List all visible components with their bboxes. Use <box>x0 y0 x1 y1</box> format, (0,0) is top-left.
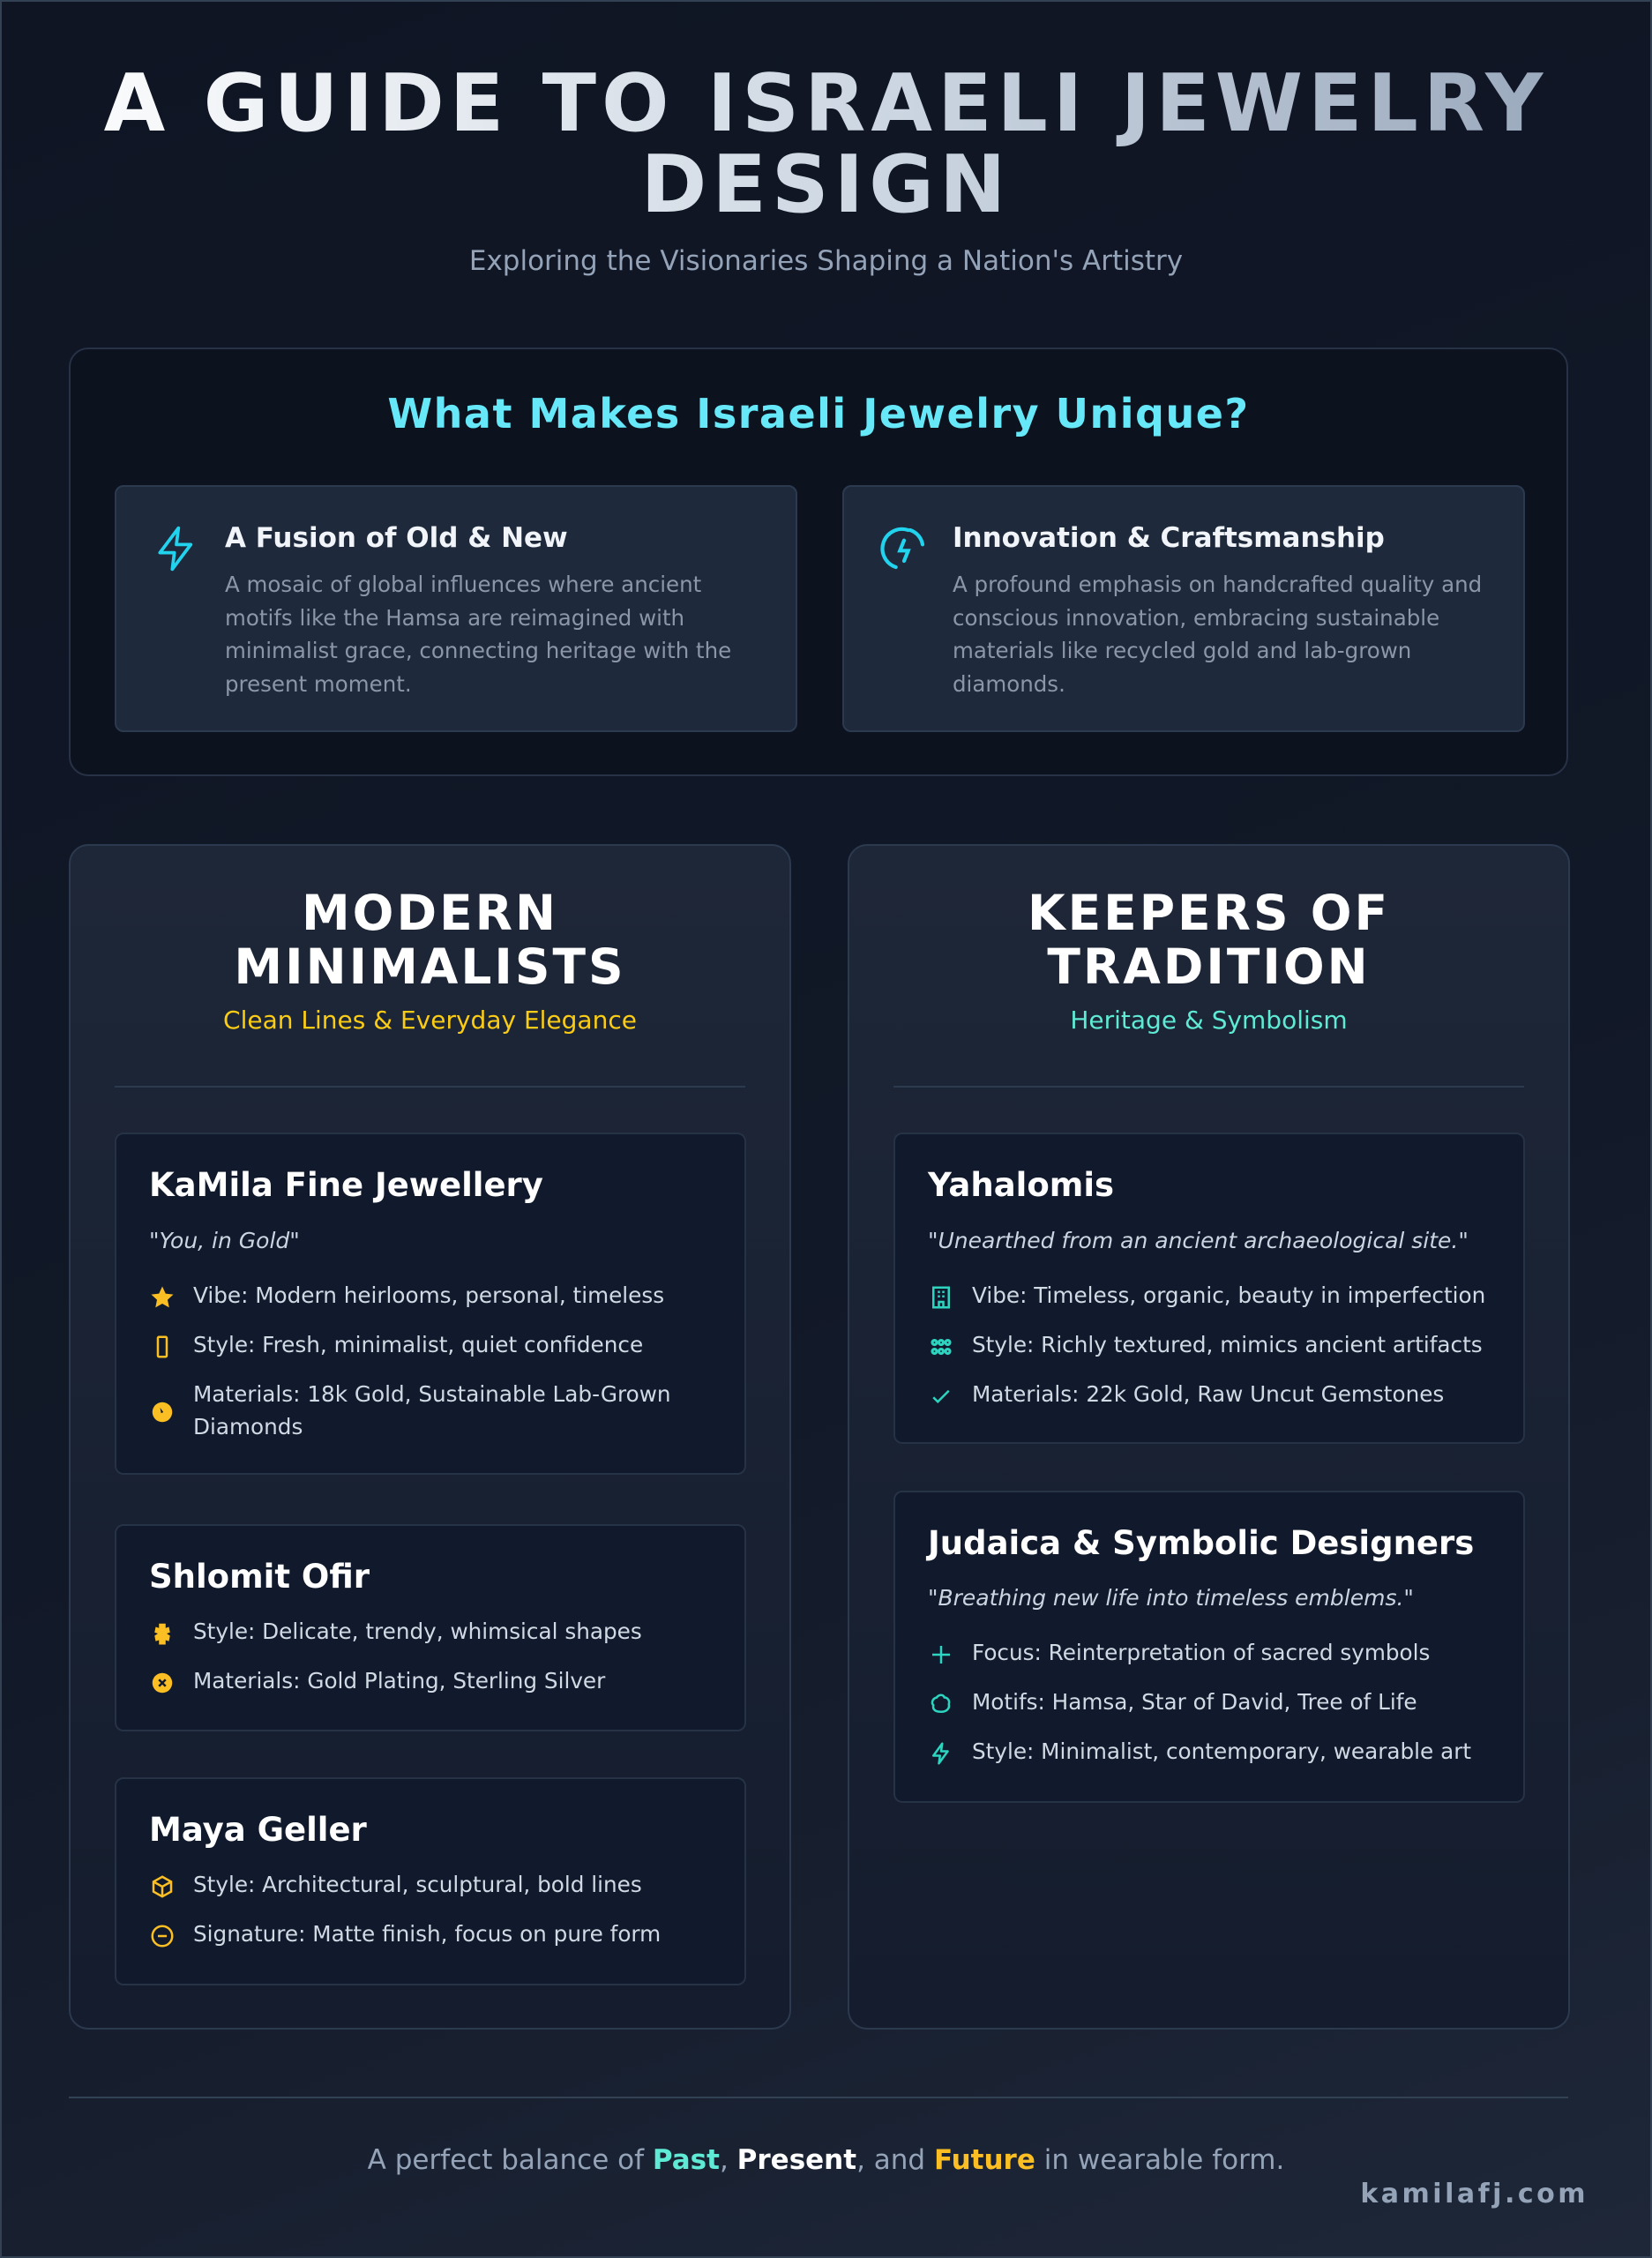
item style: Style: Richly textured, mimics ancient artifacts <box>972 1332 1483 1357</box>
subheading: Heritage & Symbolism <box>1070 1006 1348 1035</box>
card: Shlomit Ofir: Shlomit Ofir <box>149 1558 370 1596</box>
card: fusion <box>115 485 797 732</box>
item style: Style: Minimalist, contemporary, wearable art <box>972 1738 1471 1764</box>
panel: modern minimalists <box>69 844 791 2030</box>
item style: Style: Delicate, trendy, whimsical shapes <box>193 1619 642 1644</box>
subtitle: Exploring the Visionaries Shaping a Nation's Artistry <box>469 245 1183 277</box>
card: Judaica: "Breathing new life into timeless emblems." <box>928 1585 1414 1611</box>
footer url: kamilafj.com <box>1360 2179 1588 2209</box>
card: Yahalomis <box>893 1133 1525 1444</box>
card: Shlomit Ofir <box>115 1524 746 1731</box>
icon: lightning <box>158 526 192 572</box>
title <box>0 64 1652 226</box>
icon: circular arrow <box>880 527 924 570</box>
card: Maya Geller <box>115 1777 746 1985</box>
heading: MINIMALISTS <box>234 938 626 995</box>
card: Yahalomis: "Unearthed from an ancient archaeological site." <box>928 1228 1469 1253</box>
item materials: Materials: 22k Gold, Raw Uncut Gemstones <box>972 1381 1444 1407</box>
card: Judaica <box>893 1491 1525 1803</box>
heading: KEEPERS OF <box>1028 885 1390 941</box>
card: KaMila: "You, in Gold" <box>149 1228 300 1253</box>
card: fusion: A mosaic of global influences where ancient motifs like the Hamsa are reimagined with minimalist grace, connecting heritage with the present moment. <box>225 572 731 697</box>
item vibe: Vibe: Timeless, organic, beauty in imperfection <box>972 1282 1485 1308</box>
panel: what makes unique <box>69 348 1568 776</box>
item materials: Materials: 18k Gold, Sustainable Lab-Grown Diamonds <box>193 1381 671 1439</box>
item style: Style: Fresh, minimalist, quiet confidence <box>193 1332 643 1357</box>
card: KaMila <box>115 1133 746 1475</box>
card: innovation <box>842 485 1525 732</box>
heading: MODERN <box>302 885 558 941</box>
footer tagline: A perfect balance of Past, Present, and Future in wearable form. <box>368 2144 1284 2176</box>
card: Maya Geller: Maya Geller <box>149 1811 367 1849</box>
heading <box>234 885 626 995</box>
card: Yahalomis: Yahalomis <box>928 1166 1114 1204</box>
card: KaMila: KaMila Fine Jewellery <box>149 1166 543 1204</box>
title: A GUIDE TO ISRAELI JEWELRY <box>104 57 1548 150</box>
card: innovation: A profound emphasis on handcrafted quality and conscious innovation, embracing sustainable materials like recycled gold and lab-grown diamonds. <box>953 572 1482 697</box>
item style: Style: Architectural, sculptural, bold lines <box>193 1872 642 1897</box>
title: DESIGN <box>641 138 1011 231</box>
card: fusion: A Fusion of Old & New <box>225 522 568 554</box>
subheading: Clean Lines & Everyday Elegance <box>223 1006 637 1035</box>
heading <box>1028 885 1390 995</box>
item signature: Signature: Matte finish, focus on pure form <box>193 1921 661 1947</box>
panel: keepers of tradition <box>848 844 1570 2030</box>
item motifs: Motifs: Hamsa, Star of David, Tree of Life <box>972 1689 1417 1715</box>
heading: What Makes Israeli Jewelry Unique? <box>387 390 1250 437</box>
card: innovation: Innovation & Craftsmanship <box>953 522 1385 554</box>
card: Judaica: Judaica & Symbolic Designers <box>928 1524 1474 1562</box>
item vibe: Vibe: Modern heirlooms, personal, timeless <box>193 1282 664 1308</box>
heading: TRADITION <box>1047 938 1371 995</box>
item focus: Focus: Reinterpretation of sacred symbols <box>972 1640 1430 1665</box>
item materials: Materials: Gold Plating, Sterling Silver <box>193 1668 605 1694</box>
